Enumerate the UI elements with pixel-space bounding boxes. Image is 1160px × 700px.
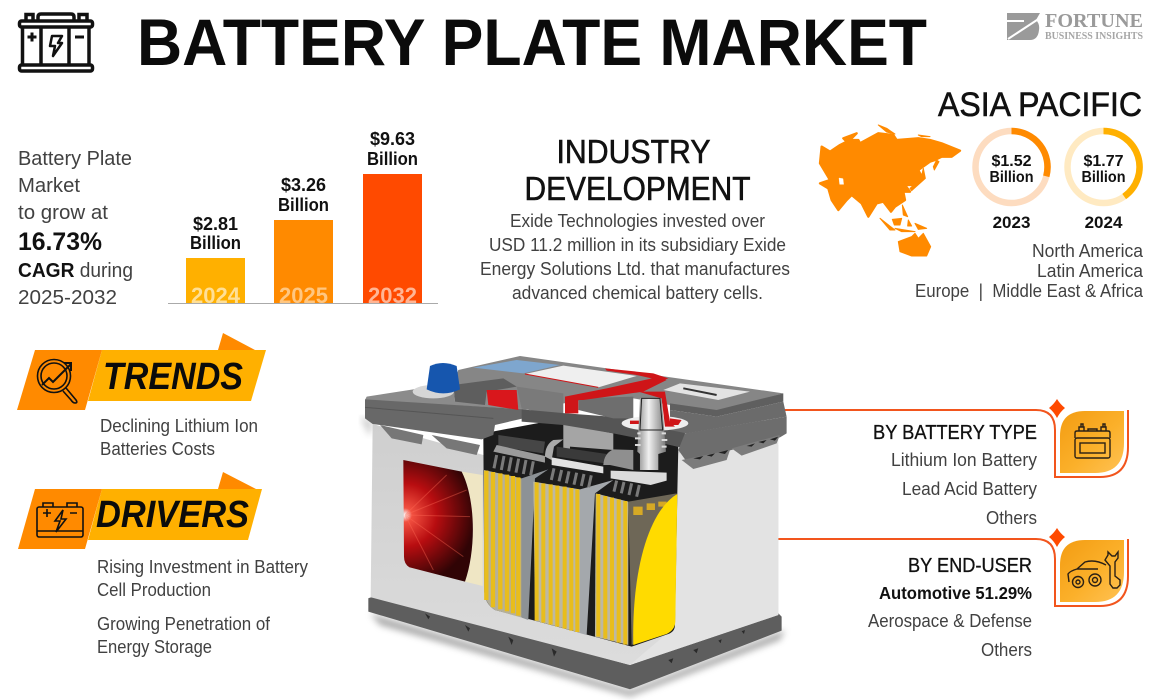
text block: other regions: Europe | Middle East & Africa [915, 281, 1144, 301]
text block: other regions: Latin America [1037, 261, 1144, 281]
battery shadow [370, 613, 785, 697]
bar chart [168, 129, 438, 308]
text block: drivers: Cell Production [97, 580, 211, 600]
plate rails [493, 435, 667, 485]
donut: 2024 [1068, 131, 1140, 232]
text block: industry development: Energy Solutions Ltd. that manufactures [480, 259, 790, 279]
donut: 2024: $1.77 [1083, 153, 1124, 170]
donut: 2023 [976, 131, 1048, 232]
bar: 2025: Billion [278, 195, 329, 215]
text block: trends: Declining Lithium Ion [100, 416, 258, 436]
text block: by battery type: Others [986, 508, 1037, 528]
bar: 2032: Billion [367, 149, 418, 169]
bar: 2025: $3.26 [281, 175, 326, 195]
red strap and cap [487, 390, 518, 410]
icon panel: battery type [1049, 399, 1124, 473]
text block: market growth: Market [18, 175, 80, 197]
logo: Fortune Business Insights: BUSINESS INSIGHTS [1045, 31, 1143, 42]
map: Asia Pacific [820, 125, 960, 256]
bar: 2025: 2025 [279, 283, 328, 308]
text block: other regions: North America [1032, 241, 1144, 261]
text block: industry development: USD 11.2 million in its subsidiary Exide [489, 235, 786, 255]
text block: by end user: BY END-USER [908, 555, 1032, 577]
battery lid [365, 356, 787, 469]
text block: trends [100, 416, 258, 459]
inner wall [563, 425, 613, 450]
bar: 2024: 2024 [191, 283, 241, 308]
label panels [473, 360, 560, 373]
text block: drivers: Rising Investment in Battery [97, 557, 308, 577]
text block: industry development [480, 133, 790, 303]
icon: magnifier with chart [38, 360, 77, 403]
donut: 2023: Billion [990, 169, 1034, 186]
text block: market growth: CAGR during [18, 260, 133, 282]
title: BATTERY PLATE MARKET [137, 5, 927, 79]
connector: end user [778, 539, 1128, 606]
bar: 2024 [186, 214, 245, 308]
text block: market growth: 16.73% [18, 228, 102, 256]
bar: 2024: Billion [190, 233, 241, 253]
text block: trends: Batteries Costs [100, 439, 215, 459]
text block: drivers [97, 557, 308, 657]
icon panel: end user [1049, 528, 1124, 602]
text block: by battery type [873, 422, 1037, 528]
donut: 2024: Billion [1082, 169, 1126, 186]
bar: 2024: $2.81 [193, 214, 238, 234]
text block: by end user: Others [981, 640, 1032, 660]
icon: battery header [20, 14, 92, 71]
bar: 2032 [363, 129, 422, 308]
donut: 2024: 2024 [1085, 213, 1123, 232]
text block: by battery type: Lead Acid Battery [902, 479, 1037, 499]
plate tabs [494, 455, 639, 497]
banner: trends [17, 333, 266, 410]
text block: drivers: Growing Penetration of [97, 614, 271, 634]
bar: 2032: $9.63 [370, 129, 415, 149]
battery base [368, 596, 782, 689]
heading: Asia Pacific: ASIA PACIFIC [938, 86, 1142, 124]
banner: drivers [18, 472, 262, 549]
text block: market growth: 2025-2032 [18, 287, 117, 309]
text block: industry development: DEVELOPMENT [524, 170, 750, 207]
text block: industry development: Exide Technologies invested over [510, 211, 765, 231]
donut: 2023: 2023 [993, 213, 1030, 232]
battery body [371, 424, 778, 665]
text block: by end user: Automotive 51.29% [879, 583, 1032, 603]
text block: by end user: Aerospace & Defense [868, 611, 1032, 631]
cell plates [484, 469, 677, 645]
negative terminal [622, 392, 688, 470]
side window [403, 460, 483, 586]
text block: other regions [915, 241, 1144, 301]
text block: market growth: to grow at [18, 202, 108, 224]
logo: Fortune Business Insights: FORTUNE [1045, 10, 1143, 32]
text block: drivers: Energy Storage [97, 637, 212, 657]
battery illustration [360, 356, 787, 697]
bar: 2025 [274, 175, 333, 308]
positive terminal [413, 363, 460, 398]
text block: by end user [868, 555, 1032, 660]
donut: 2023: $1.52 [991, 153, 1032, 170]
text block: industry development: advanced chemical battery cells. [512, 283, 763, 303]
text block: by battery type: BY BATTERY TYPE [873, 422, 1037, 444]
text block: by battery type: Lithium Ion Battery [891, 450, 1037, 470]
cutaway interior [483, 418, 678, 647]
banner: drivers: DRIVERS [96, 494, 249, 536]
text block: market growth [18, 148, 133, 309]
bar: 2032: 2032 [368, 283, 417, 308]
text block: industry development: INDUSTRY [556, 133, 710, 170]
banner: trends: TRENDS [103, 356, 243, 398]
text block: market growth: Battery Plate [18, 148, 132, 170]
icon: battery charge [37, 503, 83, 537]
connector: battery type [785, 410, 1128, 477]
logo: Fortune Business Insights [1007, 10, 1143, 42]
